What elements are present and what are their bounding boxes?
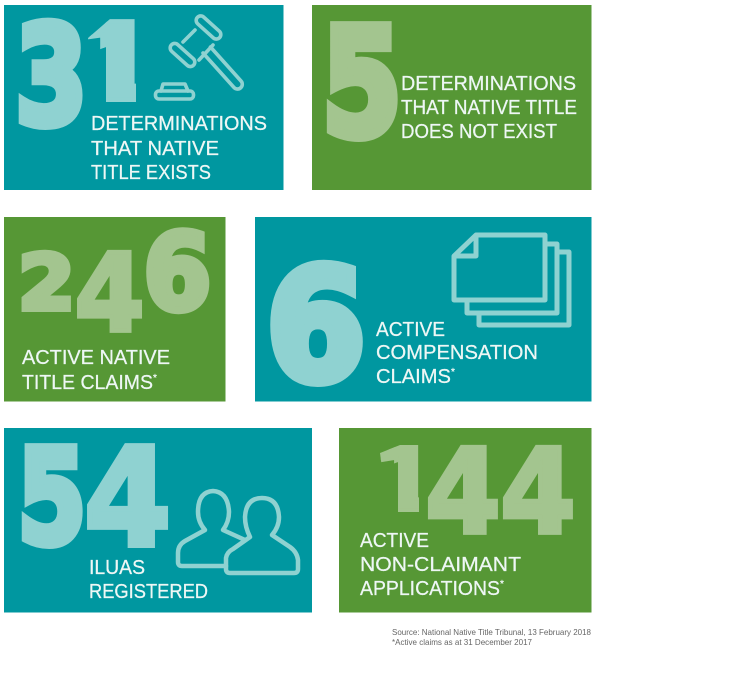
label: determinations that native title does not exist: [401, 72, 577, 143]
label: active native title claims: ACTIVE NATIVE: [22, 346, 170, 369]
panel: 5 determinations that native title does not exist: [312, 0, 592, 190]
label: active non-claimant applications: ACTIVE: [360, 529, 429, 552]
label: determinations that native title exists: TITLE EXISTS: [91, 161, 211, 184]
number: 246: 6: [144, 211, 211, 334]
panel: 54 ILUAs registered: [4, 418, 312, 612]
number: 5: 5: [322, 0, 402, 171]
label: determinations that native title exists: [91, 112, 267, 184]
number: 144: [380, 444, 573, 535]
number: 246: [18, 211, 211, 357]
label: active native title claims: [22, 346, 170, 394]
panel: 6 active compensation claims: [255, 217, 592, 416]
label: active non-claimant applications: [360, 529, 521, 600]
panel: 31 determinations that native title exists: [4, 0, 284, 190]
label: active compensation claims: [376, 318, 538, 388]
label: active compensation claims: *: [451, 367, 455, 378]
icon: gavel and block: [156, 14, 242, 99]
label: active native title claims: *: [153, 373, 157, 384]
source note: Source: National Native Title Tribunal, 13 February 2018: [392, 627, 591, 637]
label: active non-claimant applications: NON-CLAIMANT: [360, 553, 521, 576]
label: determinations that native title does not exist: THAT NATIVE TITLE: [401, 96, 577, 119]
source note: [392, 627, 591, 647]
label: determinations that native title exists: DETERMINATIONS: [91, 112, 267, 135]
label: active compensation claims: COMPENSATION: [376, 341, 538, 364]
label: determinations that native title does not exist: DETERMINATIONS: [401, 72, 576, 95]
icon: two people: [178, 491, 298, 573]
label: active compensation claims: ACTIVE: [376, 318, 445, 341]
label: active non-claimant applications: *: [500, 579, 504, 590]
number: 144: 1: [365, 431, 442, 531]
number: 144: 4: [500, 424, 576, 561]
label: ILUAs registered: ILUAS: [89, 556, 145, 579]
number: 144: 4: [425, 424, 501, 561]
number: 54: 4: [84, 418, 171, 578]
label: ILUAs registered: [89, 556, 208, 603]
number: 54: [18, 418, 171, 578]
panel: 246 active native title claims: [4, 211, 226, 402]
panel: 144 active non-claimant applications: [339, 424, 592, 612]
label: active native title claims: TITLE CLAIMS: [22, 371, 153, 394]
label: active compensation claims: CLAIMS: [376, 365, 451, 388]
label: determinations that native title exists: THAT NATIVE: [91, 137, 219, 160]
number: 31: 3: [15, 0, 87, 156]
number: 246: 4: [74, 231, 145, 357]
number: 31: 1: [59, 0, 169, 125]
label: ILUAs registered: REGISTERED: [89, 580, 208, 603]
label: active non-claimant applications: APPLICATIONS: [360, 577, 500, 600]
source note: *Active claims as at 31 December 2017: [392, 637, 532, 647]
number: 6: 6: [266, 236, 365, 416]
number: 246: 2: [18, 240, 75, 327]
icon: stacked documents: [454, 235, 569, 325]
label: determinations that native title does not exist: DOES NOT EXIST: [401, 120, 557, 143]
number: 54: 5: [18, 423, 86, 574]
number: 31: [18, 18, 136, 130]
